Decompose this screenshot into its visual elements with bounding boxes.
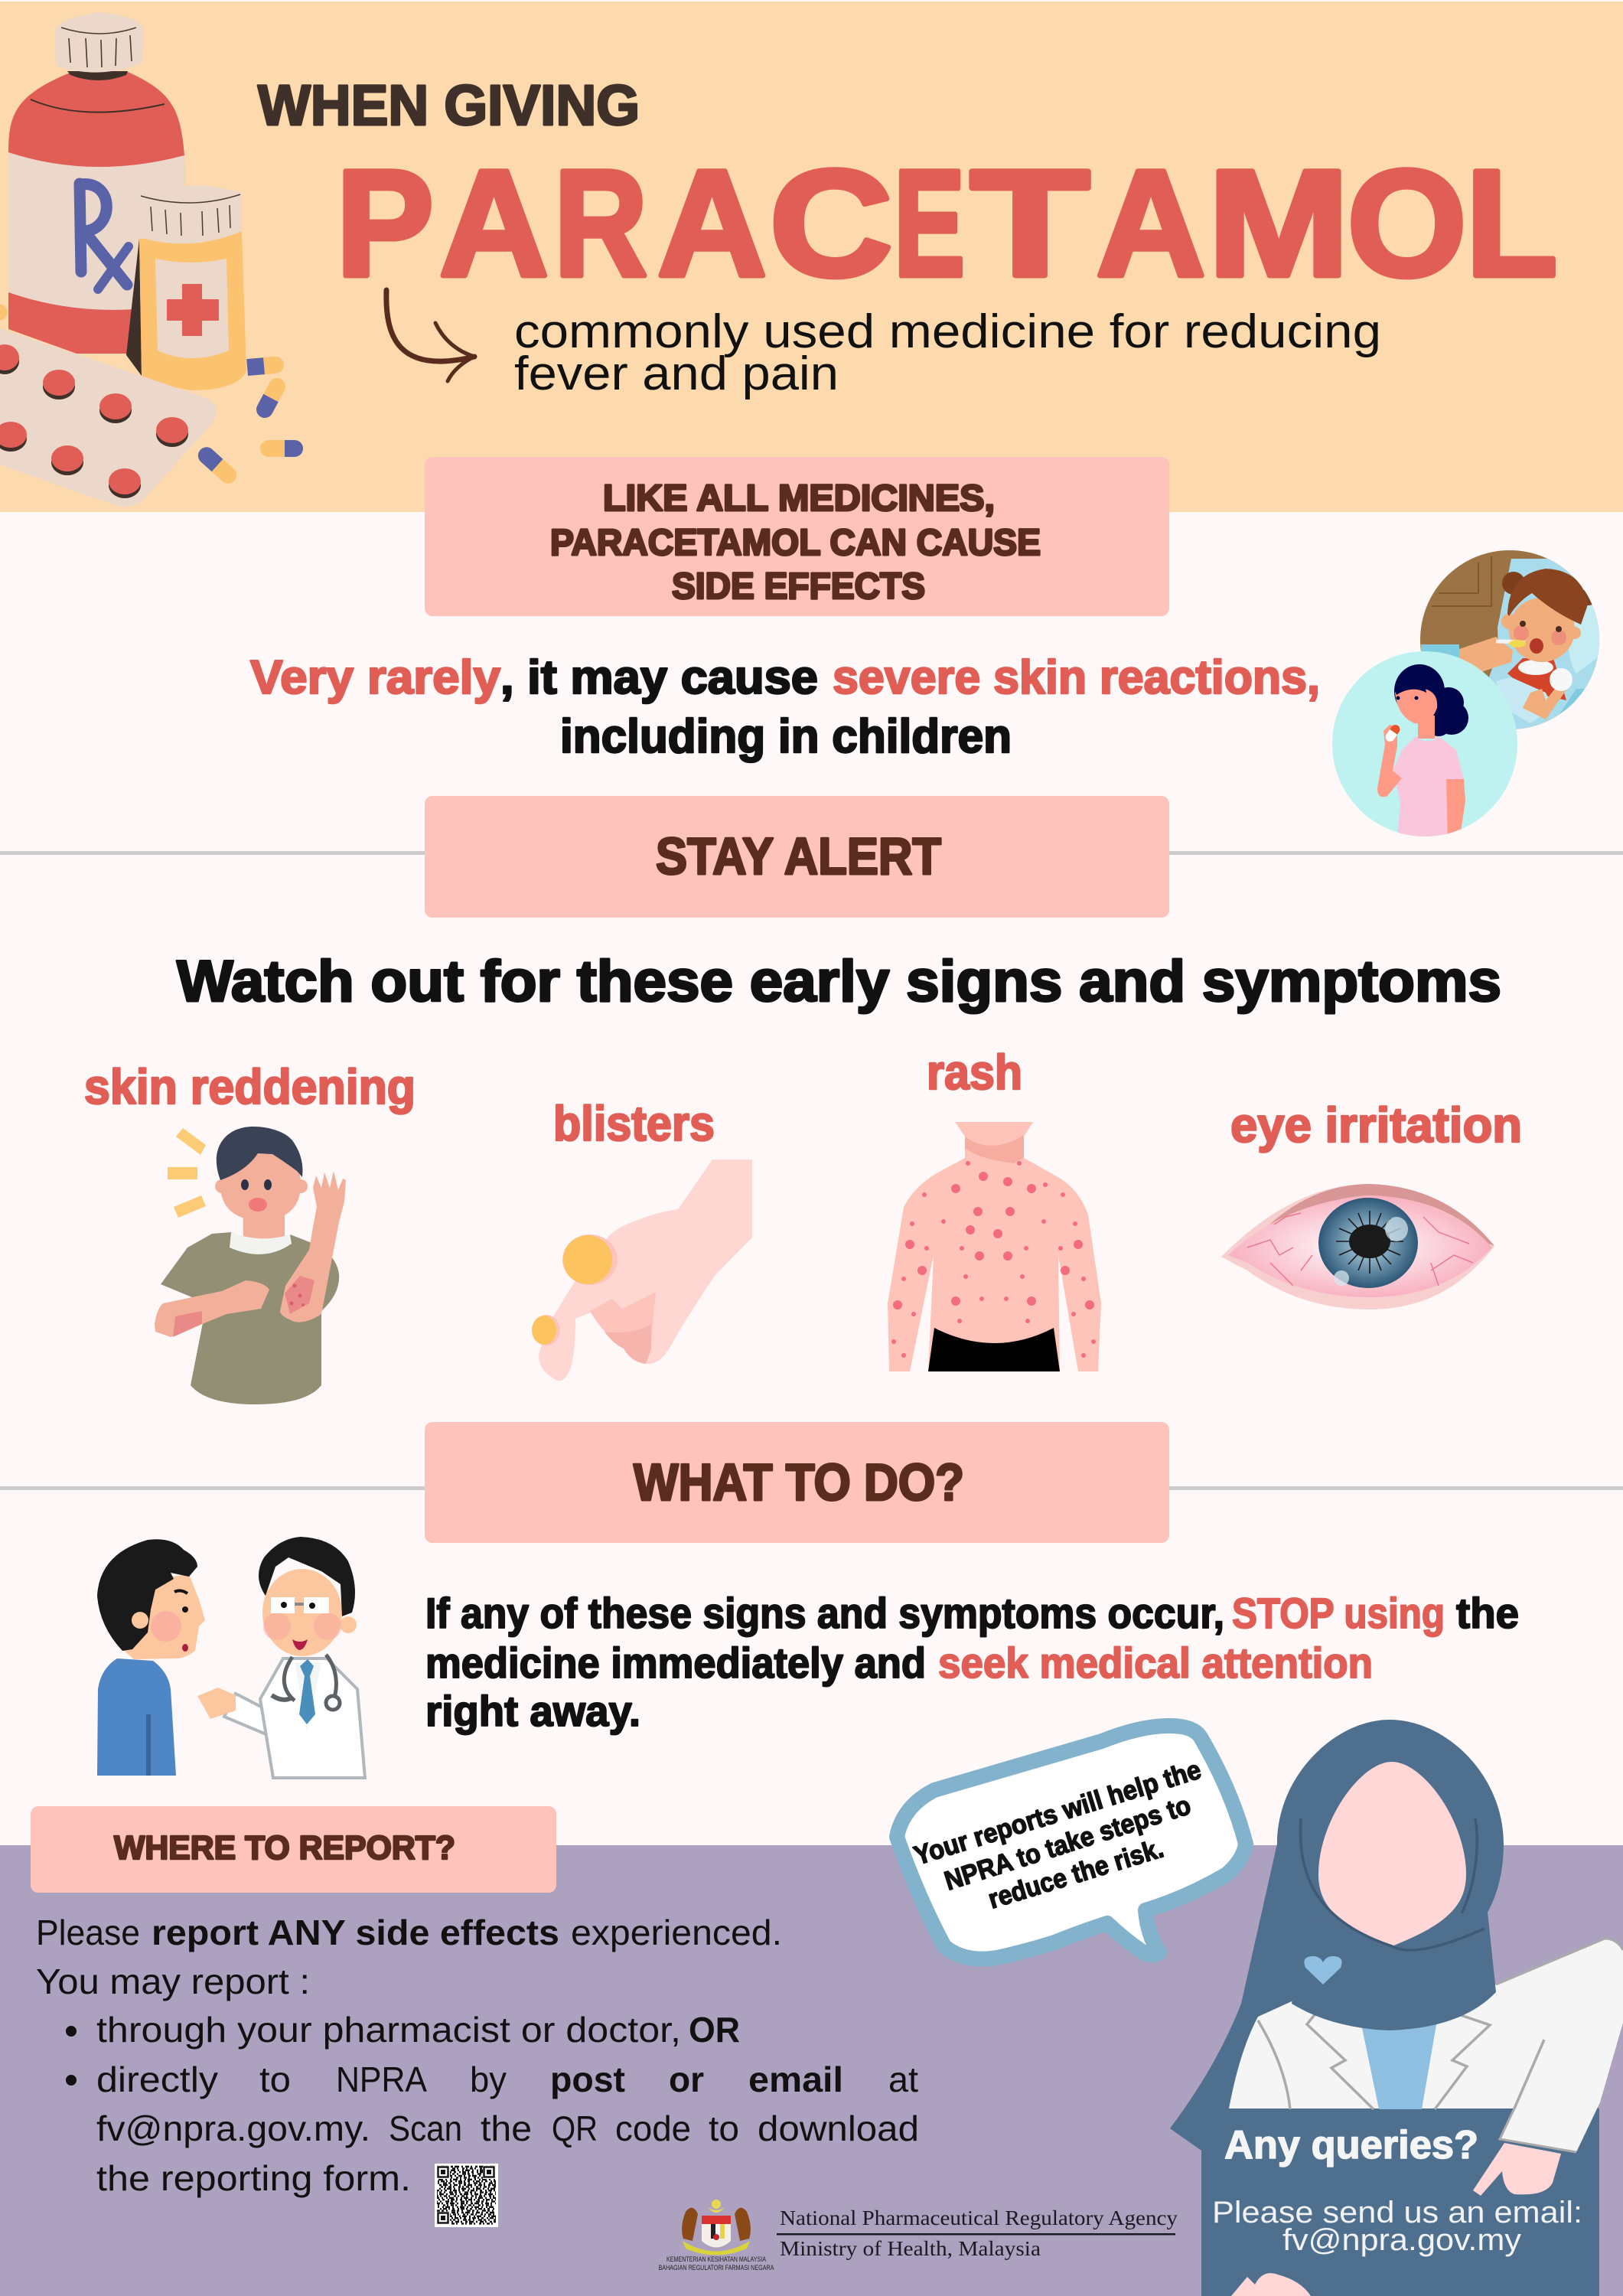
icon: heart (1304, 1956, 1342, 1985)
subtitle (514, 305, 1381, 400)
agency name (777, 2206, 1178, 2260)
title: paracetamol: T (970, 139, 1090, 308)
heading: when giving: WHEN GIVING (258, 73, 640, 137)
text: any queries: Any queries? (1224, 2123, 1478, 2167)
label: eye irritation: eye irritation (1230, 1097, 1522, 1153)
heading: early signs: Watch out for these early signs and symptoms (177, 949, 1501, 1014)
text: skin reaction warning: Very rarely (250, 651, 501, 704)
text: what to do instructions: STOP using (1232, 1589, 1445, 1637)
lab coat (1229, 1939, 1623, 2152)
shirt (1361, 2020, 1437, 2109)
title: paracetamol: A (1096, 139, 1206, 308)
text: how to report: directly (96, 2060, 218, 2099)
illustration: pharmacist in hijab (1170, 1720, 1623, 2296)
text: how to report: fv@npra.gov.my. (96, 2108, 370, 2148)
text: what to do instructions (425, 1589, 1519, 1735)
coat lapels (1258, 2013, 1544, 2109)
panel: side effects banner: SIDE EFFECTS (672, 566, 925, 607)
panel: where to report banner (31, 1806, 556, 1893)
Rx mark (80, 184, 129, 289)
QR code (435, 2164, 498, 2227)
text: skin reaction warning: severe skin reactions, (833, 651, 1320, 704)
text: how to report: Please (36, 1913, 140, 1952)
label: skin reddening: skin reddening (84, 1059, 416, 1114)
report band (0, 1845, 1623, 2296)
speech bubble: Your reports will help the (911, 1755, 1204, 1871)
text: how to report: to (709, 2108, 739, 2148)
text: what to do instructions: seek medical attention (938, 1639, 1373, 1687)
hijab drape (1292, 1913, 1496, 2030)
illustration: woman taking a pill (1332, 651, 1517, 842)
text: what to do instructions: the (1456, 1589, 1519, 1637)
blister pack (0, 328, 216, 507)
text: skin reaction warning: , it may cause (500, 651, 818, 704)
text: how to report: by (470, 2060, 507, 2099)
text: how to report (36, 1913, 919, 2198)
illustration: torso with rash (888, 1122, 1101, 1371)
text: contact email: Please send us an email: (1212, 2196, 1582, 2229)
title: paracetamol: M (1207, 139, 1350, 308)
title: paracetamol: A (657, 139, 767, 308)
title: paracetamol: R (554, 139, 647, 308)
logo caption (658, 2255, 774, 2272)
text: how to report: or (669, 2060, 704, 2099)
speech bubble (897, 1726, 1246, 1959)
title: paracetamol: A (439, 139, 549, 308)
illustration: patient talking with doctor (97, 1537, 365, 1778)
logo caption: KEMENTERIAN KESIHATAN MALAYSIA (666, 2255, 766, 2264)
logo caption: BAHAGIAN REGULATORI FARMASI NEGARA (658, 2264, 774, 2272)
text: how to report: post (550, 2060, 625, 2099)
panel: where to report banner: WHERE TO REPORT? (114, 1829, 455, 1867)
text: what to do instructions: medicine immediately and (425, 1639, 926, 1687)
text: how to report: code (615, 2108, 691, 2148)
text: how to report: through your pharmacist or doctor, (96, 2010, 681, 2050)
capsules (0, 305, 303, 487)
title: paracetamol: O (1348, 139, 1467, 308)
title: paracetamol: E (894, 139, 965, 308)
patient (97, 1539, 205, 1776)
text: how to report: OR (689, 2010, 740, 2050)
text: how to report: Scan (389, 2108, 462, 2148)
text: how to report: to (259, 2060, 291, 2099)
subtitle: commonly used medicine for reducing (514, 305, 1381, 358)
text: how to report: experienced. (571, 1913, 782, 1952)
text: how to report: NPRA (336, 2060, 427, 2099)
text: how to report: download (758, 2108, 919, 2148)
text: how to report: at (888, 2060, 918, 2099)
text: how to report: QR (552, 2108, 598, 2148)
speech bubble: reduce the risk. (985, 1833, 1167, 1915)
text: what to do instructions: right away. (425, 1687, 640, 1735)
speech bubble: NPRA to take steps to (941, 1790, 1194, 1896)
text: how to report: the reporting form. (96, 2158, 411, 2198)
lower hand (1231, 2273, 1311, 2296)
header band (0, 2, 1623, 512)
panel: stay alert banner: STAY ALERT (656, 827, 941, 885)
panel: side effects banner (425, 457, 1169, 616)
small orange bottle (126, 185, 246, 390)
illustration: man with reddened skin (155, 1127, 346, 1404)
text: how to report: You may report : (36, 1962, 310, 2001)
text: how to report: report ANY side effects (152, 1913, 559, 1952)
panel: what to do banner (425, 1422, 1169, 1543)
title: paracetamol: P (336, 139, 434, 308)
illustration: irritated eye (1221, 1184, 1494, 1309)
agency name: National Pharmaceutical Regulatory Agency (780, 2206, 1178, 2229)
text: how to report: the (481, 2108, 532, 2148)
illustration: blistered hand (532, 1159, 752, 1381)
text: how to report: email (748, 2060, 843, 2099)
title: paracetamol: C (770, 139, 892, 308)
panel: side effects banner: LIKE ALL MEDICINES, (603, 478, 995, 519)
icon: curved arrow (386, 290, 474, 381)
logo: Malaysian coat of arms (682, 2200, 751, 2255)
label: blisters: blisters (553, 1096, 715, 1151)
doctor (197, 1537, 365, 1778)
illustration: sick child being given medicine (1420, 550, 1599, 729)
face (1318, 1762, 1466, 1946)
illustration: medicine bottles and pills (0, 12, 303, 507)
panel: stay alert banner (425, 796, 1169, 918)
text: what to do instructions: If any of these signs and symptoms occur, (425, 1589, 1224, 1637)
subtitle: fever and pain (514, 347, 839, 400)
label: rash: rash (927, 1045, 1022, 1100)
text: contact email (1212, 2196, 1582, 2257)
panel: side effects banner: PARACETAMOL CAN CAUSE (550, 523, 1041, 563)
title: paracetamol: L (1466, 139, 1558, 308)
panel: what to do banner: WHAT TO DO? (634, 1453, 964, 1512)
big red bottle (8, 12, 186, 354)
text: skin reaction warning (250, 651, 1320, 763)
text: skin reaction warning: including in children (560, 710, 1012, 763)
text: contact email: fv@npra.gov.my (1282, 2223, 1521, 2257)
sleeve outline (1496, 1939, 1623, 2152)
agency name: Ministry of Health, Malaysia (780, 2237, 1041, 2260)
contact panel and robe (1170, 1720, 1599, 2296)
hand (1473, 2143, 1561, 2196)
